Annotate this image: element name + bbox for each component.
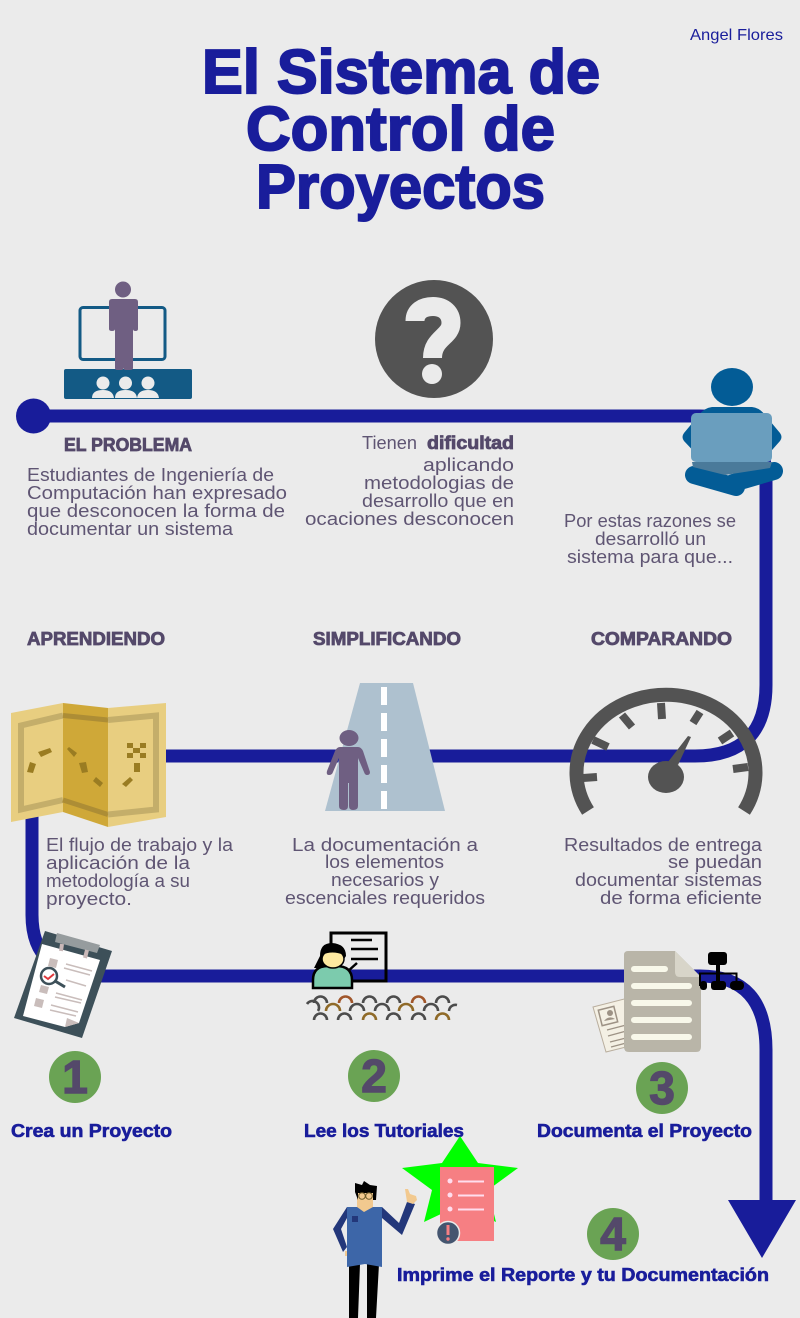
text block: el problema: Estudiantes de Ingeniería de <box>27 464 274 485</box>
text block: comparando: de forma eficiente <box>600 887 762 908</box>
step 3 number <box>636 1062 688 1114</box>
icon: presenter on stage <box>64 282 192 399</box>
icon: org chart <box>700 952 744 990</box>
text block: dificultad: aplicando <box>423 454 514 475</box>
text block: el problema: que desconocen la forma de <box>27 500 285 521</box>
icon: teacher with board and audience <box>307 933 457 1020</box>
text block: el problema: EL PROBLEMA <box>64 435 192 455</box>
text block: comparando: Resultados de entrega <box>564 834 763 855</box>
text block: aprendiendo: aplicación de la <box>46 852 191 873</box>
text block: el problema: documentar un sistema <box>27 518 234 539</box>
text block: simplificando: necesarios y <box>331 869 440 890</box>
text block: aprendiendo <box>46 834 234 909</box>
title: Proyectos <box>256 153 545 222</box>
step 4 number: 4 <box>600 1208 626 1260</box>
text block: aprendiendo: El flujo de trabajo y la <box>46 834 234 855</box>
icon: star with report <box>402 1136 518 1244</box>
text block: dificultad: ocaciones desconocen <box>305 508 514 529</box>
heading: comparando: COMPARANDO <box>591 629 732 649</box>
step 1 number <box>49 1051 101 1103</box>
icon: documents <box>593 951 701 1052</box>
text block: simplificando: los elementos <box>325 851 444 872</box>
timeline path with arrow <box>16 398 796 1258</box>
icon: road with person <box>325 683 445 811</box>
heading: aprendiendo: APRENDIENDO <box>27 629 165 649</box>
text block: por estas razones: sistema para que... <box>567 546 733 567</box>
icon: clipboard checklist <box>14 931 112 1038</box>
title <box>202 38 600 222</box>
icon: treasure map <box>11 703 166 827</box>
label: documenta el proyecto: Documenta el Proyecto <box>537 1121 752 1141</box>
text block: el problema <box>27 435 287 539</box>
label: imprime el reporte: Imprime el Reporte y tu Documentación <box>397 1265 769 1285</box>
icon: question mark <box>375 280 493 398</box>
text block: simplificando: escenciales requeridos <box>285 887 485 908</box>
text block: por estas razones: Por estas razones se <box>564 510 736 531</box>
text block: simplificando <box>285 834 485 908</box>
text block: comparando <box>564 834 763 908</box>
text block: dificultad: Tienen <box>362 432 417 453</box>
icon: man pointing <box>333 1181 417 1318</box>
text block: aprendiendo: proyecto. <box>46 888 132 909</box>
text block: comparando: se puedan <box>668 851 762 872</box>
step 2 number <box>348 1050 400 1102</box>
step 2 number: 2 <box>361 1050 387 1102</box>
text block: por estas razones: desarrolló un <box>595 528 706 549</box>
title: El Sistema de <box>202 38 600 107</box>
step 1 number: 1 <box>62 1051 88 1103</box>
label: lee los tutoriales: Lee los Tutoriales <box>304 1121 464 1141</box>
text block: por estas razones <box>564 510 736 567</box>
text block: dificultad: desarrollo que en <box>362 490 514 511</box>
text block: dificultad <box>305 432 514 529</box>
text block: dificultad: metodologias de <box>364 472 514 493</box>
author name: Angel Flores <box>690 27 783 44</box>
text block: el problema: Computación han expresado <box>27 482 287 503</box>
text block: aprendiendo: metodología a su <box>46 870 190 891</box>
title: Control de <box>246 95 555 164</box>
step 3 number: 3 <box>649 1062 675 1114</box>
label: crea un proyecto: Crea un Proyecto <box>11 1121 172 1141</box>
text block: dificultad: dificultad <box>427 433 514 453</box>
icon: speedometer gauge <box>576 695 756 811</box>
icon: person with laptop <box>682 368 782 487</box>
text block: simplificando: La documentación a <box>292 834 479 855</box>
heading: simplificando: SIMPLIFICANDO <box>313 629 461 649</box>
step 4 number <box>587 1208 639 1260</box>
text block: comparando: documentar sistemas <box>575 869 762 890</box>
